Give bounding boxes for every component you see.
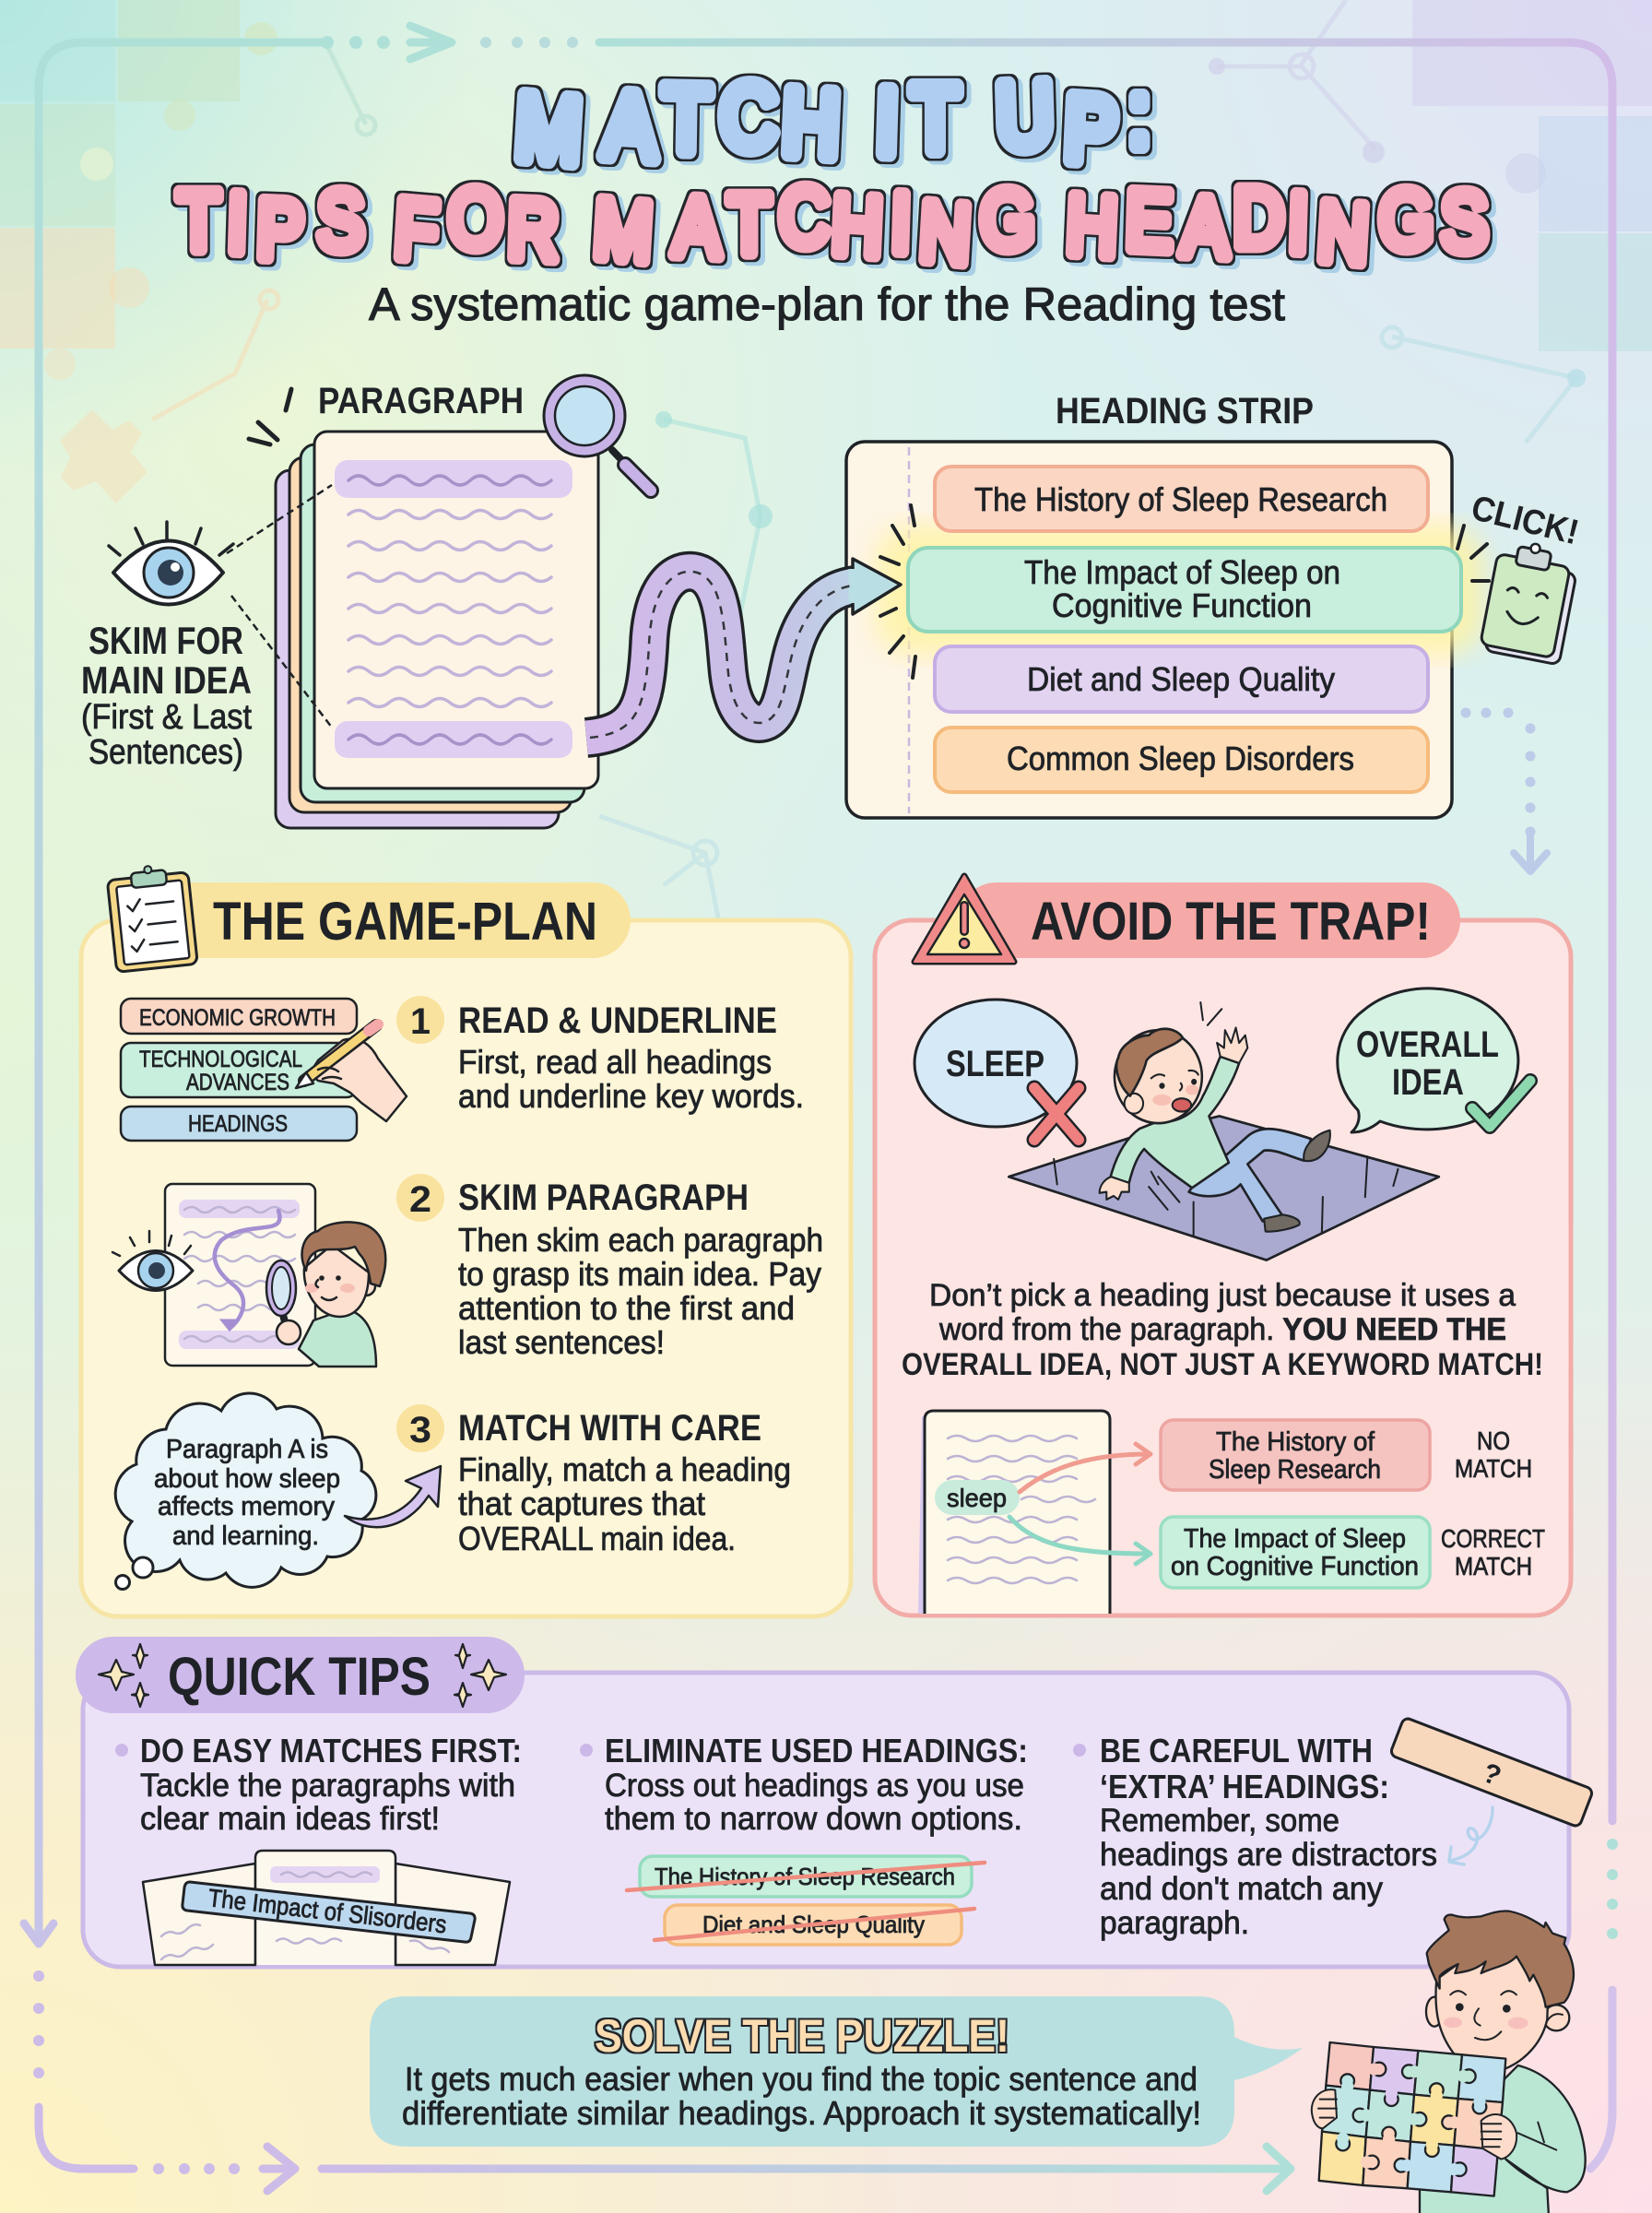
warning text: word from the paragraph. YOU NEED THE	[938, 1312, 1506, 1347]
step 3 illustration: thought cloud: affects memory	[158, 1492, 335, 1521]
tip 1 illustration: papers with strip: The Impact of Slisorders	[206, 1884, 448, 1938]
step 2 text: last sentences!	[458, 1323, 665, 1361]
banner text	[402, 2060, 1201, 2132]
step 3 text: MATCH WITH CARE	[458, 1408, 761, 1449]
skim label: (First & Last	[81, 698, 252, 737]
paragraph label: PARAGRAPH	[318, 381, 524, 421]
boy with magnifier	[266, 1222, 385, 1367]
no match label: NO	[1477, 1426, 1510, 1455]
highlighted first sentence	[335, 460, 572, 498]
scan path	[215, 1211, 280, 1328]
warning text: Don’t pick a heading just because it uses a	[929, 1278, 1516, 1313]
tip 1: Tackle the paragraphs with	[140, 1768, 515, 1804]
puzzle knobs	[1336, 2063, 1486, 2176]
mini paragraph	[165, 1184, 315, 1366]
panel: avoid the trap	[875, 876, 1571, 1615]
keyword bubble: sleep	[914, 1000, 1079, 1140]
icon: smiling clipboard	[1480, 538, 1581, 665]
tip 3: headings are distractors	[1100, 1837, 1437, 1873]
banner heading: SOLVE THE PUZZLE!	[595, 2010, 1009, 2062]
keyword match diagram: sleep	[947, 1484, 1007, 1512]
skim label: SKIM FOR	[88, 619, 243, 662]
tip 3: paragraph.	[1100, 1905, 1249, 1941]
extra heading tag with question mark: ?	[1479, 1757, 1505, 1792]
step 2 text	[458, 1178, 823, 1361]
raised hand	[1217, 1028, 1247, 1063]
background puzzle pieces and network	[0, 0, 1652, 922]
step 2 text: SKIM PARAGRAPH	[458, 1178, 749, 1218]
skim label: Sentences)	[88, 733, 243, 772]
tip 1	[115, 1732, 522, 1837]
panel background	[875, 920, 1571, 1615]
step 3 text: that captures that	[458, 1485, 705, 1522]
step 1 illustration: HEADINGS	[188, 1111, 288, 1137]
step 3 number: 3	[409, 1410, 431, 1450]
heading option 1	[935, 467, 1428, 531]
glow	[876, 526, 1484, 655]
tip 3: Remember, some	[1100, 1803, 1339, 1839]
curly arrow	[1449, 1807, 1493, 1864]
panel: quick tips	[76, 1637, 1594, 1967]
shoes	[1304, 1130, 1330, 1161]
heading option 2 selected: Cognitive Function	[1052, 586, 1312, 624]
panel background	[81, 920, 851, 1616]
step 1 illustration: TECHNOLOGICAL	[139, 1047, 302, 1072]
eye	[112, 1231, 193, 1291]
torso and arms	[1110, 1057, 1239, 1188]
step 1 text: and underline key words.	[458, 1077, 804, 1115]
arrow to no match	[1020, 1444, 1150, 1492]
sparkles	[99, 1644, 506, 1707]
keyword match diagram: The Impact of Sleep	[1184, 1524, 1406, 1554]
step 2 number	[396, 1174, 444, 1222]
correct match heading	[1161, 1517, 1430, 1588]
puzzle board	[1319, 2042, 1505, 2196]
banner text: It gets much easier when you find the topic sentence and	[405, 2060, 1198, 2098]
head	[1115, 1030, 1202, 1123]
sleep keyword	[935, 1480, 1020, 1515]
step 1 text: First, read all headings	[458, 1043, 772, 1081]
illustration: boy falling into pit	[1009, 1002, 1439, 1260]
heading option 3: Diet and Sleep Quality	[1027, 660, 1335, 698]
tip 1: DO EASY MATCHES FIRST:	[140, 1732, 522, 1769]
tip 1 illustration: papers with strip	[143, 1851, 510, 1965]
paper sheets	[276, 432, 598, 828]
keyword match diagram	[918, 1411, 1545, 1614]
panel: heading strip	[846, 442, 1489, 818]
spark lines	[249, 389, 291, 444]
step 2 number: 2	[409, 1179, 431, 1220]
correct match label: CORRECT	[1441, 1524, 1545, 1553]
subtitle: A systematic game-plan for the Reading test	[369, 278, 1285, 330]
step 3 illustration: thought cloud	[115, 1393, 441, 1590]
tip 2 illustration: crossed-out headings: The History of Sleep Research	[655, 1863, 955, 1890]
eye	[109, 522, 233, 605]
extra heading tag with question mark	[1389, 1717, 1594, 1828]
step 2 text: Then skim each paragraph	[458, 1221, 823, 1259]
no match label	[1455, 1426, 1532, 1483]
no match heading	[1161, 1420, 1430, 1490]
icon: magnifying glass	[544, 375, 651, 491]
arrow	[345, 1466, 441, 1527]
step 3 number	[396, 1404, 444, 1452]
legs	[1189, 1129, 1311, 1221]
step 3 text: OVERALL main idea.	[458, 1520, 736, 1557]
step 3 illustration: thought cloud: and learning.	[172, 1521, 319, 1551]
left hand	[1100, 1177, 1129, 1200]
step 1 illustration: ECONOMIC GROWTH	[139, 1005, 336, 1031]
correct bubble: overall idea: OVERALL	[1356, 1024, 1499, 1065]
step 1 text	[458, 1000, 804, 1115]
icon: checklist clipboard	[106, 862, 197, 972]
dotted arrow	[1460, 708, 1547, 871]
step 3 text	[458, 1408, 791, 1557]
step 3 text: Finally, match a heading	[458, 1450, 791, 1488]
no match label: MATCH	[1455, 1454, 1532, 1483]
tip 2	[580, 1732, 1028, 1837]
title	[177, 62, 1488, 281]
step 3 illustration: thought cloud: Paragraph A is	[166, 1435, 328, 1464]
hands	[1312, 2089, 1337, 2128]
game-plan heading pill: THE GAME-PLAN	[213, 892, 597, 952]
game-plan heading pill	[148, 882, 631, 958]
keyword match diagram: The History of	[1216, 1427, 1375, 1457]
face	[1435, 1943, 1549, 2072]
tip 1: clear main ideas first!	[140, 1801, 440, 1837]
solve the puzzle banner	[370, 1996, 1303, 2147]
step 1 number	[396, 996, 444, 1044]
hair	[1427, 1911, 1574, 2007]
mini document	[918, 1416, 927, 1614]
icon: warning triangle	[914, 876, 1014, 962]
tip 3	[1073, 1732, 1437, 1941]
keyword match diagram: on Cognitive Function	[1171, 1552, 1419, 1581]
hand with pencil	[296, 1024, 407, 1121]
ears	[1426, 1997, 1443, 2027]
step 2 text: attention to the first and	[458, 1289, 795, 1327]
keyword bubble: sleep: SLEEP	[946, 1044, 1044, 1084]
banner text: differentiate similar headings. Approach it systematically!	[402, 2094, 1201, 2132]
pit	[1009, 1116, 1439, 1260]
diagram: paragraph stack	[249, 375, 651, 828]
step 1 illustration	[121, 999, 407, 1141]
tip 2: them to narrow down options.	[605, 1801, 1022, 1837]
click label: CLICK!	[1468, 489, 1582, 552]
title line 2: TIPS FOR MATCHING HEADINGS	[177, 171, 1488, 281]
panel background	[83, 1673, 1569, 1967]
correct bubble: overall idea: IDEA	[1392, 1062, 1464, 1103]
trap heading pill	[959, 882, 1460, 958]
arrow: winding road	[586, 559, 901, 738]
step 1 text: READ & UNDERLINE	[458, 1000, 777, 1041]
heading option 2 selected	[908, 548, 1461, 632]
heading option 3	[935, 646, 1428, 712]
dashed leader lines	[227, 485, 332, 728]
tip 2: ELIMINATE USED HEADINGS:	[605, 1732, 1028, 1769]
step 1 illustration: ADVANCES	[186, 1070, 289, 1095]
icon: eye with skim label	[81, 485, 332, 772]
warning text	[902, 1278, 1543, 1382]
strip card	[846, 442, 1452, 818]
heading strip label: HEADING STRIP	[1056, 391, 1314, 432]
correct match label: MATCH	[1455, 1552, 1532, 1580]
illustration: boy holding puzzle	[1312, 1911, 1586, 2213]
tip 3: ‘EXTRA’ HEADINGS:	[1100, 1768, 1389, 1805]
tip 3: and don't match any	[1100, 1871, 1383, 1907]
heading option 4: Common Sleep Disorders	[1007, 740, 1354, 777]
skim label	[81, 619, 252, 772]
step 2 illustration	[112, 1184, 385, 1367]
step 2 text: to grasp its main idea. Pay	[458, 1255, 821, 1293]
highlighted last sentence	[335, 721, 572, 758]
heading option 1: The History of Sleep Research	[974, 480, 1387, 518]
quick tips heading pill: QUICK TIPS	[168, 1647, 431, 1707]
tip 2 illustration: crossed-out headings	[627, 1856, 985, 1945]
tip 2 illustration: crossed-out headings: Diet and Sleep Quality	[702, 1911, 925, 1938]
heading option 2 selected: The Impact of Sleep on	[1024, 553, 1340, 591]
skim label: MAIN IDEA	[81, 658, 252, 702]
trap heading pill: AVOID THE TRAP!	[1031, 892, 1431, 952]
title line 1: MATCH IT UP:	[513, 62, 1150, 183]
step 3 illustration: thought cloud: about how sleep	[154, 1464, 340, 1494]
text squiggles	[348, 476, 551, 744]
correct bubble: overall idea	[1338, 988, 1530, 1132]
tip 3: BE CAREFUL WITH	[1100, 1732, 1373, 1769]
panel: the game-plan	[81, 862, 851, 1616]
arrow to correct match	[1009, 1517, 1150, 1564]
heading option 4	[935, 728, 1428, 792]
quick tips heading pill	[76, 1637, 525, 1713]
tip 2: Cross out headings as you use	[605, 1768, 1024, 1804]
boy torso	[1420, 2065, 1586, 2213]
keyword match diagram: Sleep Research	[1209, 1455, 1381, 1485]
correct match label	[1441, 1524, 1545, 1580]
warning text: OVERALL IDEA, NOT JUST A KEYWORD MATCH!	[902, 1347, 1543, 1382]
banner bubble	[370, 1996, 1303, 2147]
facial features	[1456, 2003, 1464, 2011]
step 1 number: 1	[410, 1001, 431, 1042]
spark lines	[880, 505, 1489, 678]
